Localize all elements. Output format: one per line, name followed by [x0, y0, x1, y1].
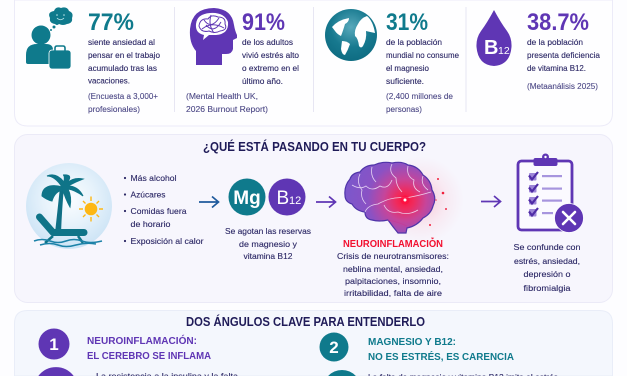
text: confused with: depresión o	[524, 269, 571, 279]
stat: 38.7%: (Metaanálisis 2025)	[527, 81, 598, 91]
panel: what is happening in your body	[14, 134, 612, 302]
badge: number 2: 2	[329, 338, 339, 357]
stat: 77%: acumulado tras las	[88, 63, 157, 73]
stat: 31%: mundial no consume	[386, 50, 459, 60]
text: neuroinflammation: Crisis de neurotransmisores:	[337, 251, 449, 261]
arrow: depletion to brain	[316, 196, 336, 208]
stat: 91%: 2026 Burnout Report)	[186, 104, 268, 114]
subheading: neuroinflammation	[87, 334, 211, 362]
icon: right lower circle	[328, 370, 356, 376]
list: triggers: Comidas fuera	[130, 206, 187, 216]
stat: 91%	[186, 9, 299, 114]
stat: 31%: el magnesio	[386, 63, 429, 73]
text: reserves depleted: vitamina B12	[244, 251, 293, 261]
stat: 31%: 31%	[386, 9, 428, 36]
panel: two key angles	[14, 310, 612, 376]
badge: number 2	[320, 332, 348, 362]
subheading: neuroinflammation: NEUROINFLAMACIÓN:	[87, 334, 197, 347]
text: neuroinflammation	[337, 237, 449, 298]
stat: 38.7%: de vitamina B12.	[527, 63, 586, 73]
text: reserves depleted: de magnesio y	[239, 239, 298, 249]
icon: B12 circle: 12	[289, 195, 301, 207]
stat: 91%: (Mental Health UK,	[186, 91, 258, 101]
icon: B12 drop: B	[484, 37, 498, 59]
icon: B12 circle	[268, 178, 306, 216]
stat: 31%: personas)	[386, 104, 422, 114]
text: confused with: Se confunde con	[514, 242, 581, 252]
text: neuroinflammation: palpitaciones, insomnio,	[345, 276, 441, 286]
stat: 38.7%	[527, 9, 600, 91]
stat: 31%	[386, 9, 459, 114]
stat: 38.7%: presenta deficiencia	[527, 50, 600, 60]
stat: 31%: suficiente.	[386, 76, 424, 86]
stat: 77%: 77%	[88, 9, 134, 36]
heading: what is happening: ¿QUÉ ESTÁ PASANDO EN TU CUERPO?	[203, 139, 426, 154]
icon: person with briefcase and thought cloud	[26, 7, 73, 69]
arrow: brain to misdiagnosis	[481, 196, 500, 207]
stat: 77%: vacaciones.	[88, 76, 130, 86]
stat: 38.7%: 38.7%	[527, 9, 589, 36]
text: confused with: fibromialgia	[524, 283, 571, 293]
subheading: magnesium and B12: NO ES ESTRÉS, ES CARENCIA	[368, 350, 514, 363]
text: neuroinflammation: neblina mental, ansiedad,	[343, 264, 443, 274]
subheading: magnesium and B12	[368, 336, 514, 363]
text: reserves depleted	[225, 226, 311, 261]
stat: 31%: (2,400 millones de	[386, 91, 453, 101]
stat: 77%: siente ansiedad al	[88, 37, 155, 47]
arrow: triggers to depletion	[199, 196, 218, 208]
icon: left lower circle	[38, 367, 74, 376]
icon: Mg circle	[228, 178, 266, 216]
icon: beach scene	[26, 163, 112, 249]
list: triggers: Más alcohol	[130, 173, 177, 183]
stat: 91%: vivió estrés alto	[242, 50, 299, 60]
subheading: magnesium and B12: MAGNESIO Y B12:	[368, 336, 456, 348]
stat: 91%: de los adultos	[242, 37, 293, 47]
text: neuroinflammation: irritabilidad, falta de aire	[344, 288, 442, 298]
badge: number 1	[38, 328, 70, 360]
list: triggers: Azúcares	[130, 190, 166, 200]
subheading: neuroinflammation: EL CEREBRO SE INFLAMA	[87, 350, 211, 362]
stat: 38.7%: de la población	[527, 37, 583, 47]
list: triggers	[124, 173, 204, 246]
stat: 77%: (Encuesta a 3,000+	[88, 91, 158, 101]
stat: 31%: de la población	[386, 37, 442, 47]
icon: B12 drop: 12	[498, 45, 510, 57]
badge: number 1: 1	[49, 335, 59, 354]
icon: clipboard with cross	[518, 154, 584, 232]
icon: B12 circle: B	[276, 188, 289, 209]
text: neuroinflammation: NEUROINFLAMACIÓN	[343, 237, 443, 250]
icon: inflamed brain	[345, 156, 464, 244]
icon: head with tangled brain	[190, 8, 237, 65]
text: confused with	[514, 242, 581, 293]
list: triggers: Exposición al calor	[130, 236, 204, 246]
stat: 91%: último año.	[242, 76, 283, 86]
stat: 91%: 91%	[242, 9, 285, 36]
heading: two key angles: DOS ÁNGULOS CLAVE PARA ENTENDERLO	[186, 314, 425, 329]
panel: statistics	[14, 0, 612, 126]
stat: 91%: o extremo en el	[242, 63, 299, 73]
icon: Mg circle: Mg	[233, 188, 261, 209]
stat: 77%: pensar en el trabajo	[88, 50, 160, 60]
text: reserves depleted: Se agotan las reservas	[225, 226, 311, 236]
stat: 77%	[88, 9, 160, 114]
list: triggers: de horario	[130, 219, 171, 229]
text: confused with: estrés, ansiedad,	[514, 256, 580, 266]
stat: 77%: profesionales)	[88, 104, 140, 114]
icon: B12 drop	[476, 10, 512, 66]
icon: globe	[325, 9, 377, 61]
